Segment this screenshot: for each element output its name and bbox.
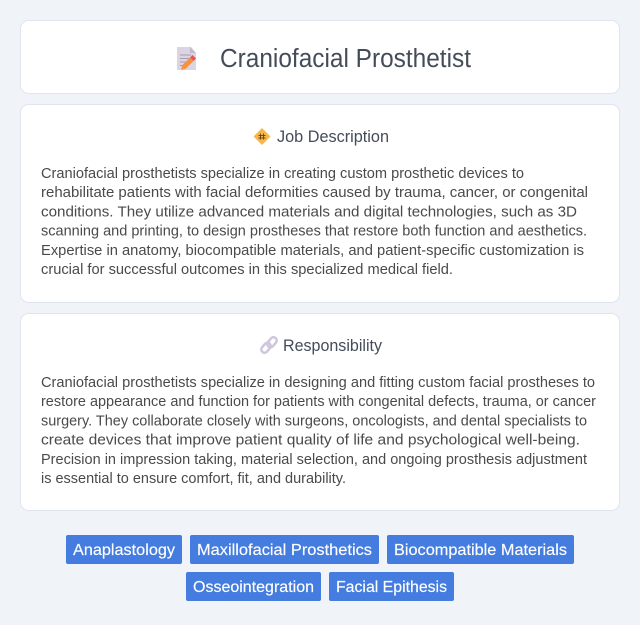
text block: job description: conditions. They utilize advanced materials and digital technologies, such as 3D — [41, 204, 577, 220]
text block: responsibility: Craniofacial prosthetists specialize in designing and fitting custom facial prostheses to — [41, 375, 595, 391]
text block: responsibility: Precision in impression taking, material selection, and ongoing prosthesis adjustment — [41, 452, 587, 468]
tag: Osseointegration: Osseointegration — [193, 579, 314, 596]
text block: responsibility: restore appearance and function for patients with congenital defects, trauma, or cancer — [41, 394, 596, 410]
text block: job description: Expertise in anatomy, biocompatible materials, and patient-specific customization is — [41, 243, 584, 259]
tag: Maxillofacial Prosthetics: Maxillofacial Prosthetics — [197, 542, 372, 559]
tag: Anaplastology — [66, 535, 182, 564]
tag: Biocompatible Materials: Biocompatible Materials — [394, 542, 567, 559]
tag: Anaplastology: Anaplastology — [73, 542, 175, 559]
heading: job description: Job Description — [277, 128, 389, 146]
panel: job description — [20, 104, 620, 302]
heading: responsibility: Responsibility — [283, 337, 383, 355]
text block: job description: scanning and printing, to design prostheses that restore both function and aesthetics. — [41, 224, 587, 240]
tag: Facial Epithesis — [329, 572, 454, 601]
icon: document with pencil — [177, 47, 196, 70]
icon: link — [260, 336, 278, 354]
text block: responsibility: create devices that improve patient quality of life and psychological well-being. — [41, 433, 580, 449]
tag: Osseointegration — [186, 572, 321, 601]
text block: responsibility: surgery. They collaborate closely with surgeons, oncologists, and dental specialists to — [41, 413, 587, 429]
text block: responsibility: is essential to ensure comfort, fit, and durability. — [41, 471, 346, 487]
icon: warning diamond — [254, 128, 270, 145]
text block: job description — [41, 166, 588, 278]
text block: job description: Craniofacial prosthetists specialize in creating custom prosthetic devices to — [41, 166, 524, 182]
title: Craniofacial Prosthetist — [220, 45, 471, 73]
tag: Facial Epithesis: Facial Epithesis — [336, 579, 447, 596]
text block: responsibility — [41, 375, 596, 487]
panel: title card — [20, 20, 620, 94]
panel: responsibility — [20, 314, 620, 510]
tag: Biocompatible Materials — [387, 535, 574, 564]
text block: job description: crucial for successful outcomes in this specialized medical field. — [41, 262, 453, 278]
tag: Maxillofacial Prosthetics — [190, 535, 379, 564]
text block: job description: rehabilitate patients with facial deformities caused by trauma, cancer, or congenital — [41, 185, 588, 201]
